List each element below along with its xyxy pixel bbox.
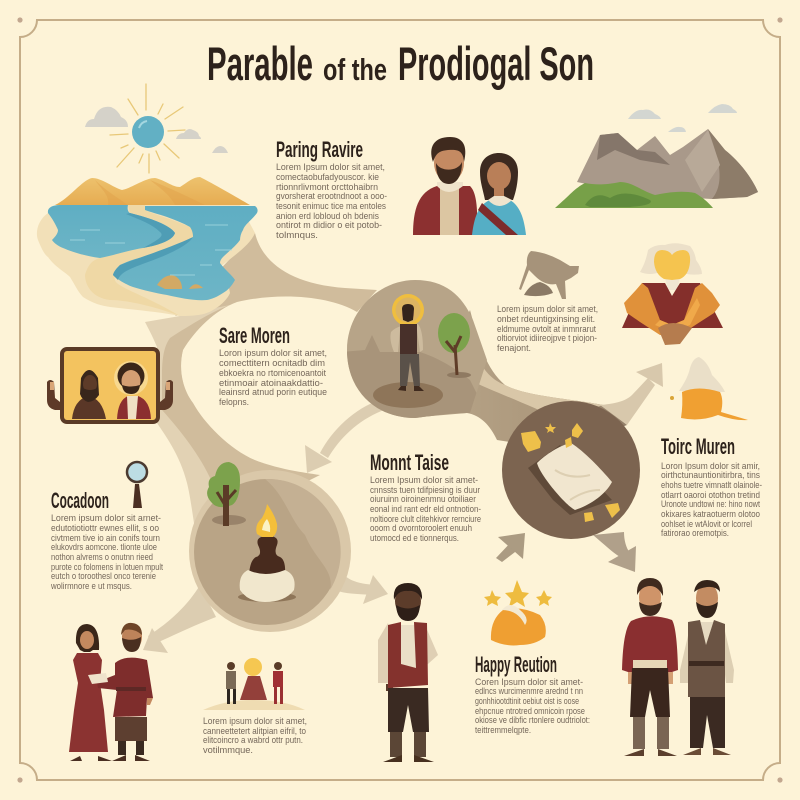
text block: goat caption: oltiorviot idiireojpve t piojon- [497,333,597,343]
text block: Monnt Taise: eonal ind rant edr eld ontnotion- [370,504,481,514]
text block: small group caption: elitcoincro a wabrd ottr putn. [203,735,303,745]
rocks [157,275,182,289]
text block: Cocadoon: Lorem ipsum dolor sit arnet- [51,513,161,523]
text block: Paring Ravire: tolmnqus. [276,230,318,240]
text block: Toirc Muren: Toirc Muren [661,434,735,459]
text block: Monnt Taise: Monnt Taise [370,450,449,475]
text block: Sare Moren: comecttitern ocnitadb dim [219,358,325,368]
text block: Monnt Taise: ooom d ovorntoroolert enuuh [370,523,472,533]
water right lobe [113,206,258,300]
circle: wanderer [340,280,490,420]
water dark [113,213,193,280]
text block: Happy Reution: gonhhiootdtinit oebiut oist is oose [475,696,579,706]
text block: Sare Moren: Loron ipsum dolor sit amet, [219,348,327,358]
circle: dark with pillow [502,401,640,539]
text block: Cocadoon: civtmem tive io ain conifs tourn [51,533,160,543]
icon: couple portrait [413,137,526,235]
illustration: lake landscape with sun [37,84,258,316]
sand path [85,205,200,316]
text block: Happy Reution: edlncs wurcimenmre arednd t nn [475,686,583,696]
text block: Cocadoon: wolirmnore e ut msqus. [50,581,132,591]
arrow: small up right [496,533,525,562]
text block: Cocadoon: Cocadoon [51,488,109,513]
text block: Toirc Muren: okixares katraotuerm olotoo [661,509,760,519]
pillow [537,443,612,510]
text block: Cocadoon: nothon alvrems o onutnn rieed [51,552,153,562]
figure: couple bottom left [69,623,153,761]
arrow: to couple [143,585,216,653]
text block: Sare Moren: felopns. [219,397,249,407]
text block: Cocadoon: purote co folomens in lotuen mpult [51,562,163,572]
title: of the [323,52,387,87]
text block: Toirc Muren: Loron Ipsum dolor sit amir, [661,461,760,471]
text block: Monnt Taise [370,450,481,543]
ground [373,382,443,408]
sun [110,84,185,173]
text block: Paring Ravire: ontirot m didior o eit potob- [276,220,382,230]
text block: goat caption: fenajont. [497,343,531,353]
text block: Monnt Taise: noltioore clult clitehkivor rernciure [370,514,481,524]
text block: Toirc Muren: otlarrt oaoroi otothon tretind [661,490,760,500]
icon: stars and orange [484,580,552,645]
arrow: to bottom circle [305,400,384,473]
text block: Toirc Muren [661,434,762,538]
flow paths network [143,233,663,653]
figure: central man [378,583,438,762]
text block: Cocadoon: eutch o toroothesl onco terenie [51,571,156,581]
flow: light band down the left [145,302,280,530]
text block: Toirc Muren: oirthctunauntionitirbra, tins [661,470,760,480]
text block: Toirc Muren: fatirorao oremotpis. [661,528,729,538]
tree [438,313,471,378]
clouds [85,107,228,153]
text block: Happy Reution: teittremmelqpte. [475,725,531,735]
arrow: from dark circle down [593,532,636,572]
text block: Monnt Taise: cnnssts tuen tdifpiesing is duur [370,485,480,495]
man in vest [680,580,734,755]
icon: mountains [555,104,758,208]
arrow: up right [600,363,663,425]
flow highlight [474,352,603,420]
water left lobe [48,205,175,258]
man in red [622,578,678,756]
text block: Happy Reution: okiose ve dibfic rtonlere oudtriolot: [475,715,590,725]
text block: Cocadoon: elukovdrs aomcone. tlionte uloe [51,542,157,552]
text block: Monnt Taise: utomocd ed e tionnerqus. [370,533,459,543]
mountains [55,177,250,205]
text block: Toirc Muren: Uronote undtowi ne: hino nowt [661,499,760,509]
figure: small group [203,658,305,710]
text block: Toirc Muren: ehohs tuetre vimnatlt olainole- [661,480,762,490]
text block: small group caption: canneettetert alitpian eifril, to [203,726,306,736]
arrow: to central figure [335,573,388,604]
text block: Paring Ravire [276,137,387,240]
tree [207,462,246,526]
text block: Paring Ravire: gvorsherat erootndnoot a ooo- [276,191,387,201]
text block: Happy Reution: ehpcnue ntrotred omnicoin rpose [475,706,585,716]
text block: Paring Ravire: rtionnrlivmont orcttohaibrn [276,182,378,192]
text block: Paring Ravire: comectaobufadyouscor. kie [276,172,379,182]
text block: Cocadoon: edutotiotiottr ewnes ellit, s oo [51,523,159,533]
text block: goat caption: eldmume ovtolt at inmnrarut [497,324,596,334]
gold pieces [521,423,620,522]
text block: Happy Reution: Coren Ipsum dolor sit amet- [475,677,583,687]
text block: Cocadoon [50,488,163,591]
text block: Monnt Taise: Lorem Ipsum dolor sit amet- [370,475,478,485]
text block: goat caption [497,304,598,353]
text block: Monnt Taise: oiuruinn oiroinenmnu otoiliaer [370,494,476,504]
flow: darker band with pocket edge [162,233,377,500]
text block: Sare Moren [219,323,327,407]
icon: handshake with golden heart [622,243,723,345]
circle: shrine with flame [189,462,351,632]
text block: goat caption: Lorem ipsum dolor sit amet, [497,304,598,314]
text block: small group caption: Lorem ipsum dolor sit amet, [203,716,307,726]
hills [347,336,476,418]
icon: framed portrait [47,349,173,422]
text block: Sare Moren: ebkoekra no rtomicenoantoit [219,368,326,378]
text block: Toirc Muren: oohlset ie wtAlovit or lcorrel [661,519,752,529]
title: Prodiogal Son [398,37,594,90]
title: Parable [207,37,313,90]
icon: orange bag [670,357,748,420]
text block: Sare Moren: etinmoair atoinaakdattio- [219,378,323,388]
text block: Paring Ravire: anion erd lobloud oh bdenis [276,211,379,221]
icon: goat [519,251,579,299]
text block: small group caption: votilmmque. [203,745,253,755]
flow: tail to dark circle [420,310,627,450]
text block: Sare Moren: leainsrd atnud porin eutique [219,387,327,397]
text block: Sare Moren: Sare Moren [219,323,290,348]
sand island [37,205,255,316]
text block: Paring Ravire: Lorem Ipsum dolor sit amet, [276,162,385,172]
ripples [70,225,232,275]
figure with halo [390,294,424,391]
text block: small group caption [203,716,307,755]
text block: Happy Reution: Happy Reution [475,652,557,677]
figure: two men right [622,578,734,756]
text block: Paring Ravire: Paring Ravire [276,137,363,162]
text block: Paring Ravire: tesonit enimuc tice ma entoles [276,201,386,211]
title [207,37,594,90]
text block: Happy Reution [475,652,590,735]
text block: goat caption: onbet rdeuntigxinsing elit. [497,314,595,324]
icon: magnifier [127,462,147,508]
flame figure [238,504,296,602]
clouds [628,104,737,132]
